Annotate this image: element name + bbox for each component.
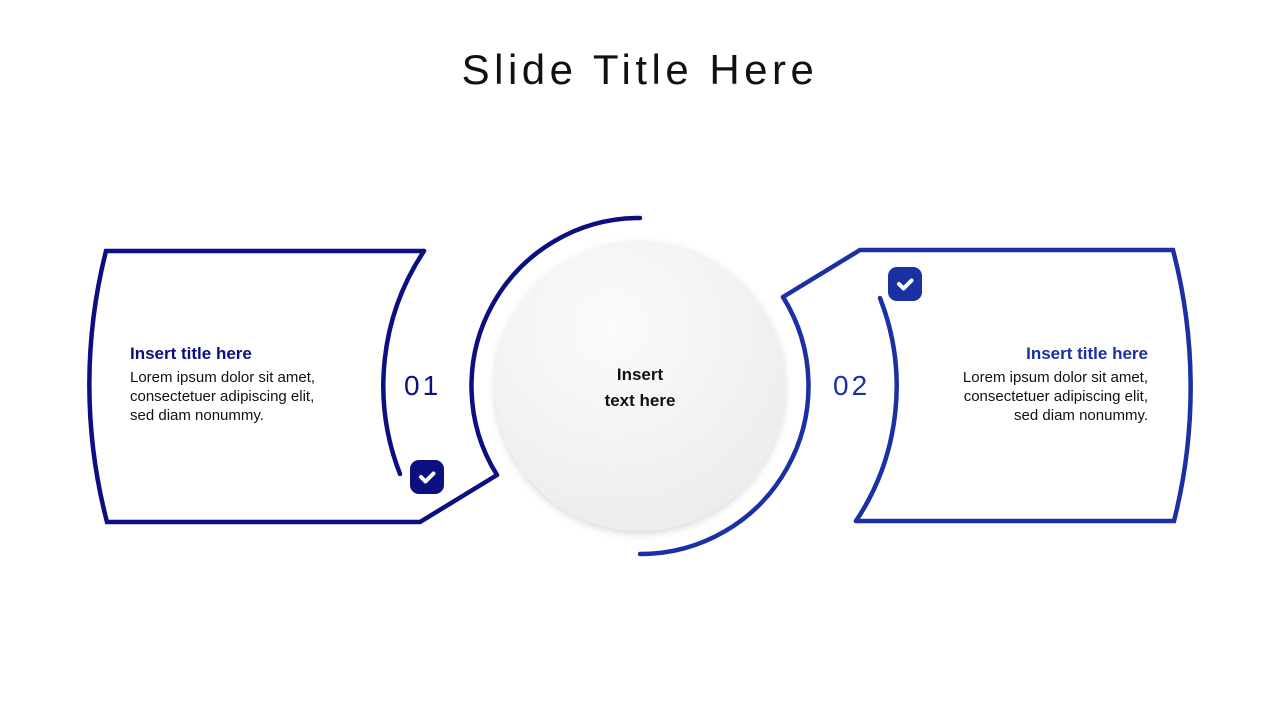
icon: check left bbox=[410, 460, 444, 494]
text block right: consectetuer adipiscing elit, bbox=[964, 388, 1148, 405]
text block right: Lorem ipsum dolor sit amet, bbox=[963, 369, 1148, 386]
text block right: sed diam nonummy. bbox=[1014, 407, 1148, 424]
text block left: sed diam nonummy. bbox=[130, 407, 264, 424]
text block right bbox=[963, 344, 1148, 424]
number 01: 01 bbox=[404, 370, 441, 401]
text block right: Insert title here bbox=[1026, 344, 1148, 363]
number 02: 02 bbox=[833, 370, 870, 401]
icon: check right bbox=[888, 267, 922, 301]
panel: left box bbox=[89, 218, 640, 522]
text block left: consectetuer adipiscing elit, bbox=[130, 388, 314, 405]
center text bbox=[604, 365, 675, 410]
center text: text here bbox=[605, 391, 675, 410]
title: Slide Title Here bbox=[462, 46, 818, 93]
text block left: Lorem ipsum dolor sit amet, bbox=[130, 369, 315, 386]
text block left bbox=[130, 344, 315, 424]
center circle bbox=[495, 241, 785, 531]
text block left: Insert title here bbox=[130, 344, 252, 363]
panel: right box bbox=[640, 250, 1191, 554]
center text: Insert bbox=[617, 365, 663, 384]
